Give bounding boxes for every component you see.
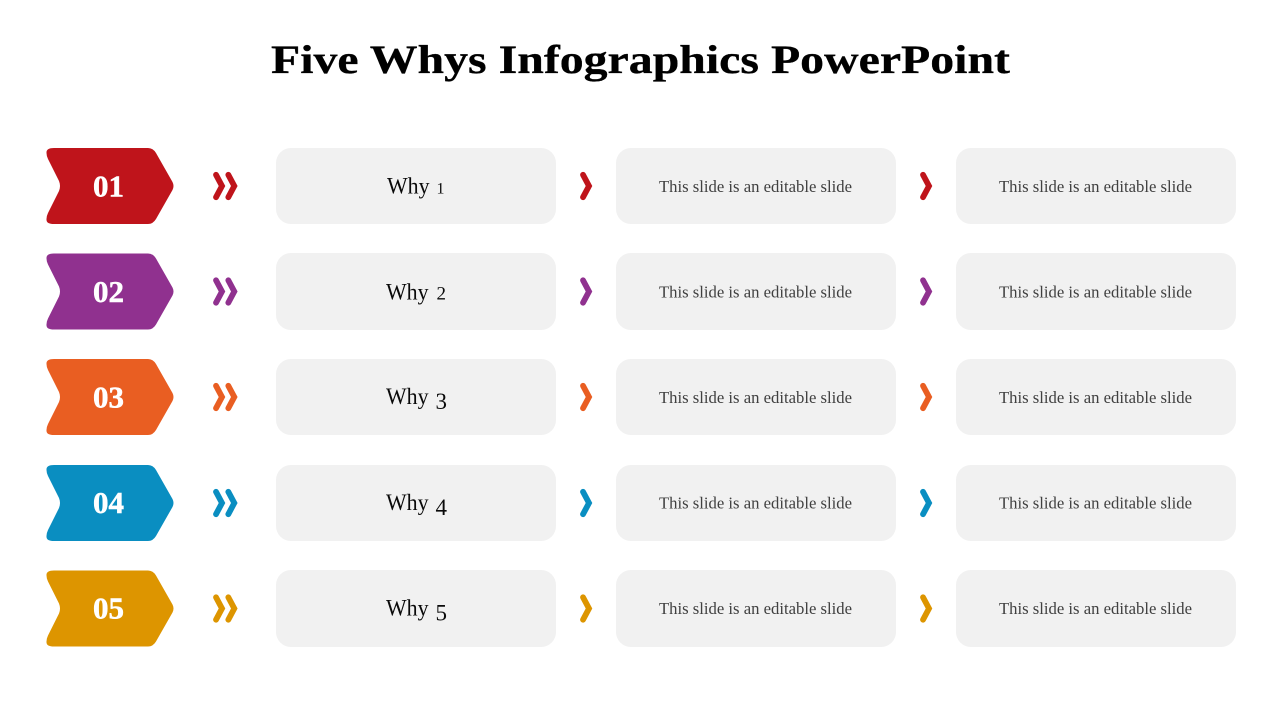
row 1 bbox=[46, 148, 1236, 224]
badge 02 bbox=[46, 254, 174, 330]
box: text 2b bbox=[956, 253, 1236, 330]
box: Why 3: Why bbox=[386, 384, 429, 410]
chevron arrow 3a bbox=[583, 386, 589, 408]
box: Why 3 bbox=[276, 359, 556, 435]
box: text 2a bbox=[616, 253, 896, 330]
box: text 5a: This slide is an editable slide bbox=[659, 599, 852, 618]
box: text 5b bbox=[956, 570, 1236, 647]
box: text 4b: This slide is an editable slide bbox=[999, 494, 1192, 512]
box: text 3b: This slide is an editable slide bbox=[999, 388, 1192, 407]
box: text 1a bbox=[616, 148, 896, 224]
chevron arrow 4b bbox=[923, 492, 929, 514]
box: text 4a: This slide is an editable slide bbox=[659, 494, 852, 512]
box: Why 5 bbox=[276, 570, 556, 647]
box: Why 3: 3 bbox=[436, 389, 447, 414]
double chevron arrow 1 bbox=[216, 175, 234, 197]
row 5 bbox=[46, 570, 1236, 647]
row 2 bbox=[46, 253, 1236, 330]
row 4 bbox=[46, 465, 1236, 541]
box: Why 2 bbox=[276, 253, 556, 330]
box: text 4a bbox=[616, 465, 896, 541]
box: Why 4: Why bbox=[386, 490, 429, 516]
box: text 2a: This slide is an editable slide bbox=[659, 282, 852, 302]
box: text 3b bbox=[956, 359, 1236, 435]
badge 02: 02 bbox=[93, 274, 124, 309]
chevron arrow 5a bbox=[583, 597, 589, 620]
box: Why 5: 5 bbox=[436, 600, 447, 626]
chevron arrow 5b bbox=[923, 597, 929, 620]
box: Why 4: 4 bbox=[436, 495, 448, 520]
badge 05: 05 bbox=[93, 590, 124, 626]
box: text 1b: This slide is an editable slide bbox=[999, 177, 1192, 196]
box: Why 4 bbox=[276, 465, 556, 541]
badge 04 bbox=[46, 465, 174, 541]
badge 04: 04 bbox=[93, 485, 124, 520]
box: text 2b: This slide is an editable slide bbox=[999, 282, 1192, 302]
box: text 1b bbox=[956, 148, 1236, 224]
chevron arrow 3b bbox=[923, 386, 929, 408]
title: Five Whys Infographics PowerPoint bbox=[271, 37, 1011, 82]
badge 05 bbox=[46, 570, 174, 646]
box: text 1a: This slide is an editable slide bbox=[659, 177, 852, 196]
badge 03 bbox=[46, 359, 174, 435]
box: Why 2: 2 bbox=[436, 284, 446, 304]
double chevron arrow 5 bbox=[216, 597, 234, 620]
box: Why 2: Why bbox=[386, 280, 429, 306]
box: Why 1 bbox=[276, 148, 556, 224]
box: text 3a: This slide is an editable slide bbox=[659, 388, 852, 407]
box: text 3a bbox=[616, 359, 896, 435]
chevron arrow 1a bbox=[583, 175, 589, 197]
box: text 4b bbox=[956, 465, 1236, 541]
double chevron arrow 4 bbox=[216, 492, 234, 514]
badge 03: 03 bbox=[93, 380, 124, 414]
chevron arrow 2a bbox=[583, 280, 589, 303]
double chevron arrow 2 bbox=[216, 280, 234, 303]
box: Why 1: Why bbox=[387, 174, 430, 200]
chevron arrow 4a bbox=[583, 492, 589, 514]
box: text 5a bbox=[616, 570, 896, 647]
row 3 bbox=[46, 359, 1236, 435]
box: Why 5: Why bbox=[386, 596, 429, 622]
badge 01: 01 bbox=[93, 168, 124, 204]
box: Why 1: 1 bbox=[436, 180, 444, 198]
box: text 5b: This slide is an editable slide bbox=[999, 599, 1192, 618]
chevron arrow 1b bbox=[923, 175, 929, 197]
badge 01 bbox=[46, 148, 174, 224]
double chevron arrow 3 bbox=[216, 386, 234, 408]
chevron arrow 2b bbox=[923, 280, 929, 303]
